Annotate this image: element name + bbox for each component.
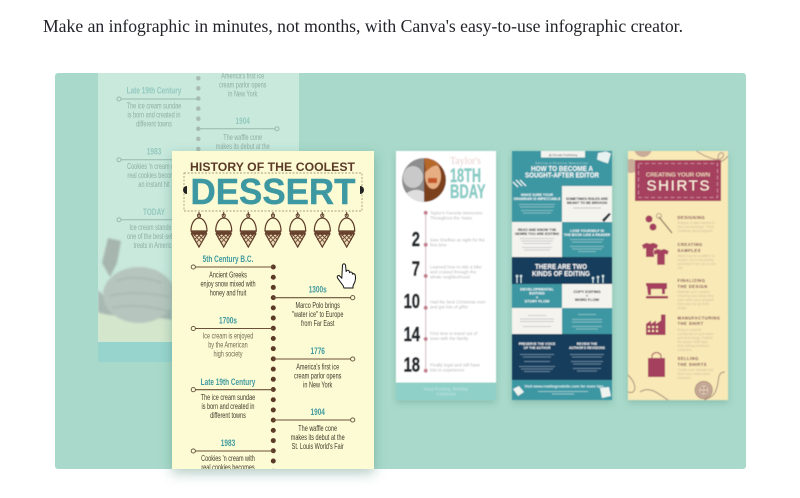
poster title: [190, 162, 356, 204]
item: designing: Analyze & take interest in: [678, 221, 715, 225]
entry: 5th century: Ancient Greeks: [209, 272, 247, 280]
faded timeline entries: an instant hit: [138, 181, 170, 189]
item: manufacturing: [678, 316, 720, 352]
item: finalizing: FINALIZING: [678, 278, 706, 283]
entry: late 19th century: [201, 377, 256, 420]
item: manufacturing: Bring to network: [678, 328, 702, 332]
item: manufacturing: THE SHIRT: [678, 321, 704, 326]
navy section: voice and revisions: AUTHOR'S REVISIONS: [569, 346, 606, 350]
item: manufacturing: companies on your team: [678, 332, 714, 336]
memories text: and got lots of gifts!: [430, 304, 468, 310]
tip cells row 2: LOSE YOURSELF IN: [570, 229, 604, 233]
entry: 1700s: 1700s: [219, 315, 237, 326]
banner: CREATING YOUR OWN: [646, 172, 710, 178]
entry: late 19th century: Late 19th Century: [201, 377, 256, 387]
bday footer text: [424, 386, 469, 396]
item: finalizing: shape.: [678, 306, 687, 310]
poster title: HISTORY OF THE COOLEST: [190, 160, 356, 174]
item: finalizing: [678, 278, 714, 310]
entry: 1700s: [203, 315, 253, 359]
item: finalizing: THE DESIGN: [678, 284, 708, 289]
faded timeline entries: Ice cream stands as: [129, 224, 179, 232]
entry: 5th century: 5th Century B.C.: [203, 254, 253, 264]
panel: teal showcase background: [55, 73, 746, 469]
item: creating samples: Work it up on a pattern or: [678, 254, 716, 258]
navy section: voice and revisions: PRESERVE THE VOICE: [519, 342, 556, 346]
poster title: DESSERT: [190, 171, 356, 212]
bday heading: 18TH: [450, 166, 481, 187]
icon: book: [597, 152, 611, 164]
item: creating samples: sculpt it out in necessary: [678, 258, 714, 262]
entry: 1983: Cookies 'n cream with: [201, 455, 255, 463]
tip cells row 2: THE BOOK LIKE A READER: [564, 233, 611, 237]
entry: 1776: cream parlor opens: [294, 373, 342, 381]
memories text: Had the best Christmas ever: [430, 300, 486, 304]
entry: 1300s: "water ice" to Europe: [292, 311, 344, 319]
row of ice cream cone icons: [191, 212, 355, 247]
developmental and copy editing cells: [520, 284, 612, 308]
timeline dots: [271, 267, 276, 475]
editor heading: Editing a Positive Manuscript: [535, 161, 589, 165]
faded timeline entries: The waffle cone: [223, 134, 262, 142]
poster: how to become a sought-after editor: [512, 151, 612, 400]
ages: 14: [404, 323, 420, 346]
developmental and copy editing cells: WORD FLOW: [575, 298, 600, 302]
faded timeline entries: 1983: [147, 146, 162, 157]
tip cells row 1: GRAMMAR IS IMPECCABLE: [513, 197, 561, 201]
entry: 1904: 1904: [310, 407, 325, 417]
faded timeline entries: 1904: [235, 116, 250, 126]
entry: 1904: The waffle cone: [298, 425, 337, 433]
entry: late 19th century: The ice cream sundae: [201, 394, 255, 402]
faded timeline entries: The ice cream sundae: [127, 103, 181, 111]
entry: 1300s: 1300s: [309, 284, 327, 295]
item: designing: creatively about apparel.: [678, 229, 714, 233]
editor heading: HOW TO BECOME A: [531, 166, 593, 173]
memories text: Throughout the Years: [430, 216, 473, 220]
faded timeline entries: cream parlor opens: [219, 82, 267, 90]
entry: 1700s: by the American: [208, 342, 248, 350]
editor footer: Visit www.readtogreatsite.com for more tips: [524, 384, 604, 388]
item: finalizing: Maintain your creation: [678, 290, 710, 294]
faded timeline entries: one of the best-selling: [127, 233, 181, 241]
item: manufacturing: the proper cloth type: [678, 340, 708, 344]
entry: 1300s: from Far East: [301, 320, 334, 328]
publisher tab: [541, 151, 585, 158]
entry: 1300s: [292, 284, 344, 328]
item: selling: business.: [678, 376, 692, 380]
entry: 1904: makes its debut at the: [291, 434, 345, 442]
memories text: Taylor's Favorite Memories: [430, 210, 483, 216]
item: creating samples: [678, 242, 716, 270]
navy banner: two kinds of editing: [512, 257, 612, 284]
memories text: first time: [430, 242, 447, 248]
entry: late 19th century: is born and created in: [202, 403, 255, 411]
icon: pen: [602, 213, 611, 222]
item: selling: THE SHIRTS: [678, 362, 707, 367]
entry: 1983: [201, 440, 254, 469]
poster: history of the coolest dessert: [172, 151, 374, 475]
editor footer: [513, 384, 611, 398]
entry: 1776: [294, 346, 342, 390]
memories text: [430, 210, 486, 372]
item: selling: SELLING: [678, 356, 699, 361]
icon: sewing machine: [646, 283, 668, 298]
banner: SHIRTS: [646, 178, 710, 194]
item: manufacturing: could line.: [678, 348, 692, 352]
navy banner: two kinds of editing: KINDS OF EDITING: [532, 269, 590, 278]
faded timeline entries: America's first ice: [221, 73, 264, 81]
bday footer text: Keep Rocking, Birthday: [424, 386, 469, 392]
icon: t-shirts: [642, 243, 669, 265]
decorative buttons and thread: [624, 139, 730, 400]
memories text: Learned how to ride a bike: [430, 264, 482, 270]
faded timeline entries: real cookies becomes: [127, 172, 181, 180]
memories text: First time to travel out of: [430, 331, 478, 336]
ages: 10: [404, 290, 420, 313]
tip cells row 2: [512, 222, 611, 257]
poster: creating your own shirts: [624, 139, 730, 400]
faded timeline entries: different towns: [136, 121, 172, 129]
entry: 1904: St. Louis World's Fair: [292, 443, 344, 451]
icon: needle and buttons: [646, 214, 672, 233]
item: designing: [678, 215, 715, 233]
icon: hand cursor: [337, 264, 356, 288]
tip cells row 1: SOMETIMES RULES ARE: [566, 197, 609, 201]
item: finalizing: they may can go their: [678, 302, 710, 306]
entry: 1700s: Ice cream is enjoyed: [203, 333, 253, 341]
entry: 5th century: enjoy snow mixed with: [200, 281, 256, 289]
poster: Taylor's 18th bday: [396, 151, 496, 400]
faded timeline entries: is born and created in: [128, 112, 181, 120]
item: designing: DESIGNING: [678, 215, 705, 220]
banner: [635, 160, 721, 201]
entry: 1776: 1776: [310, 346, 325, 356]
editor heading: [525, 161, 599, 180]
developmental and copy editing cells: COPY EDITING: [573, 290, 601, 294]
memories text: and cruised through the: [430, 270, 477, 274]
item: creating samples: CREATING: [678, 242, 703, 247]
developmental and copy editing cells: =: [586, 294, 589, 298]
poster: faded background dessert timeline: [98, 60, 299, 362]
developmental and copy editing cells: STORY FLOW: [524, 300, 550, 304]
tip cells row 1: MAKE SURE YOUR: [521, 193, 553, 197]
item: creating samples: and allow it can do on one: [678, 262, 716, 266]
memories text: town with the family: [430, 336, 469, 341]
faded timeline entries: Cookies 'n cream with: [127, 163, 181, 171]
ages: 18: [404, 353, 420, 376]
faded timeline dots: [196, 76, 200, 151]
publisher tab: @ Female Publishing: [549, 153, 578, 157]
item: creating samples: SAMPLES: [678, 248, 701, 253]
editor heading: SOUGHT-AFTER EDITOR: [525, 172, 599, 180]
navy section: voice and revisions: [512, 334, 612, 380]
entry: 1983: real cookies becomes: [201, 464, 255, 472]
entry: 1776: in New York: [303, 382, 333, 390]
item: manufacturing: and technology. Finalize: [678, 336, 713, 340]
ages: [404, 228, 420, 376]
selection handles: [183, 186, 364, 194]
faded footer band: [98, 342, 172, 362]
memories text: whole neighborhood: [430, 274, 470, 280]
entry: 5th century: [200, 254, 256, 298]
entry: 1904: [291, 407, 345, 451]
dashed selection box: [184, 173, 362, 211]
entry: 1300s: Marco Polo brings: [295, 302, 340, 310]
tip cells row 2: GENRE YOU ARE EDITING: [515, 232, 559, 236]
developmental and copy editing cells: =: [536, 296, 539, 300]
bday heading: BDAY: [450, 182, 486, 203]
faded timeline entries: makes its debut at the: [216, 143, 270, 151]
ages: 2: [412, 228, 420, 251]
navy banner: two kinds of editing: THERE ARE TWO: [535, 262, 587, 271]
tip cells row 2: READ AND KNOW THE: [518, 228, 557, 232]
entry: 1983: 1983: [221, 438, 236, 448]
bday footer text: Celebrant: [437, 392, 456, 396]
ages: 7: [412, 257, 420, 280]
faded timeline entries: in New York: [228, 91, 258, 99]
entry: 1700s: high society: [213, 351, 243, 359]
faded timeline entries: treats in America: [133, 242, 175, 250]
memories text: Saw Shelfiee at night for the: [430, 238, 485, 242]
editing description cells: [512, 308, 602, 334]
icon: large button: [695, 382, 712, 398]
icon: factory: [646, 314, 666, 335]
item: finalizing: have when your program: [678, 298, 714, 302]
faded timeline entries: Late 19th Century: [127, 85, 182, 96]
item: selling: store your online store: [678, 372, 710, 376]
icon: stripes: [513, 180, 526, 187]
navy section: voice and revisions: REVIEW THE: [577, 342, 598, 346]
timeline connector lines: [191, 265, 355, 453]
item: designing: their surroundings. Think: [678, 225, 714, 229]
entry: late 19th century: different towns: [210, 412, 246, 420]
faded timeline entries: TODAY: [143, 207, 165, 217]
tip cells row 1: MEANT TO BE BROKEN: [567, 201, 608, 205]
faded timeline entries: [117, 73, 279, 250]
item: selling: Create your website and: [678, 368, 713, 372]
item: finalizing: ensuring very adept they: [678, 294, 714, 298]
intro sentence: Make an infographic in minutes, not months, with Canva's easy-to-use infographic creator.: [43, 16, 683, 36]
item: selling: [678, 356, 713, 380]
icon: shopping bag: [648, 352, 665, 377]
entry: 5th century: honey and fruit: [210, 290, 246, 298]
memories text: Finally legal and still have: [430, 362, 481, 368]
navy section: voice and revisions: OF THE AUTHOR: [524, 346, 551, 350]
item: manufacturing: MANUFACTURING: [678, 316, 720, 320]
developmental and copy editing cells: DEVELOPMENTAL: [520, 288, 555, 292]
ice cream photo: [98, 238, 175, 342]
developmental and copy editing cells: EDITING: [529, 292, 545, 296]
vertical timeline: [424, 211, 428, 373]
bday heading: [450, 156, 486, 203]
item: manufacturing: that nothing harmless: [678, 344, 709, 348]
tip cells row 1: [513, 186, 612, 222]
split portrait photo: [402, 158, 446, 202]
bday heading: Taylor's: [450, 156, 481, 167]
memories text: lots to experience: [430, 368, 465, 372]
entry: 1776: America's first ice: [296, 364, 339, 372]
item: creating samples: line: [678, 266, 683, 270]
